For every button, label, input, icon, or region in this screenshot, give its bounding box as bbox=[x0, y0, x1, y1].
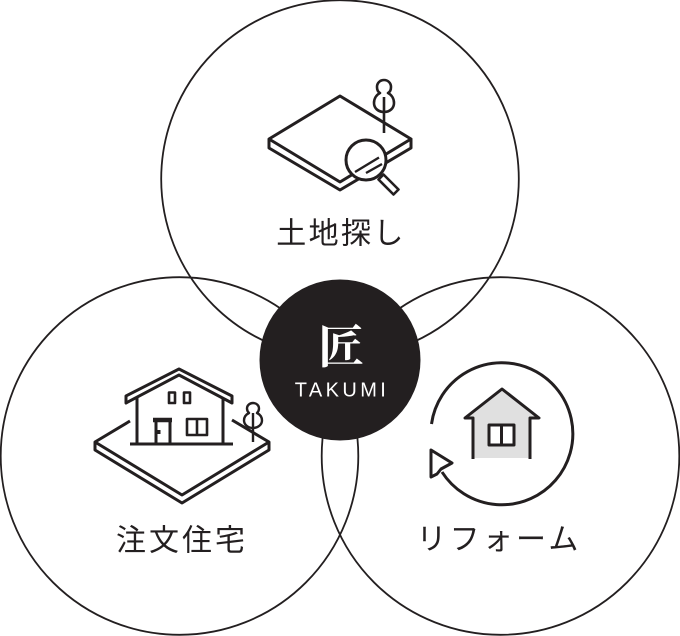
circle: custom home bbox=[1, 277, 358, 635]
logo kanji: 匠 bbox=[318, 311, 364, 377]
icon: land plot with tree and magnifier bbox=[269, 80, 411, 194]
label: custom home: 注文住宅 bbox=[116, 524, 248, 558]
center badge bbox=[260, 280, 420, 440]
circle: land search bbox=[161, 0, 519, 358]
circle: renovation bbox=[322, 277, 679, 635]
logo wordmark: TAKUMI bbox=[295, 380, 389, 402]
label: land search: 土地探し bbox=[276, 218, 406, 250]
icon: house with renovation arrow bbox=[431, 363, 573, 505]
label: renovation: リフォーム bbox=[416, 524, 582, 556]
icon: house on plot bbox=[95, 369, 269, 503]
